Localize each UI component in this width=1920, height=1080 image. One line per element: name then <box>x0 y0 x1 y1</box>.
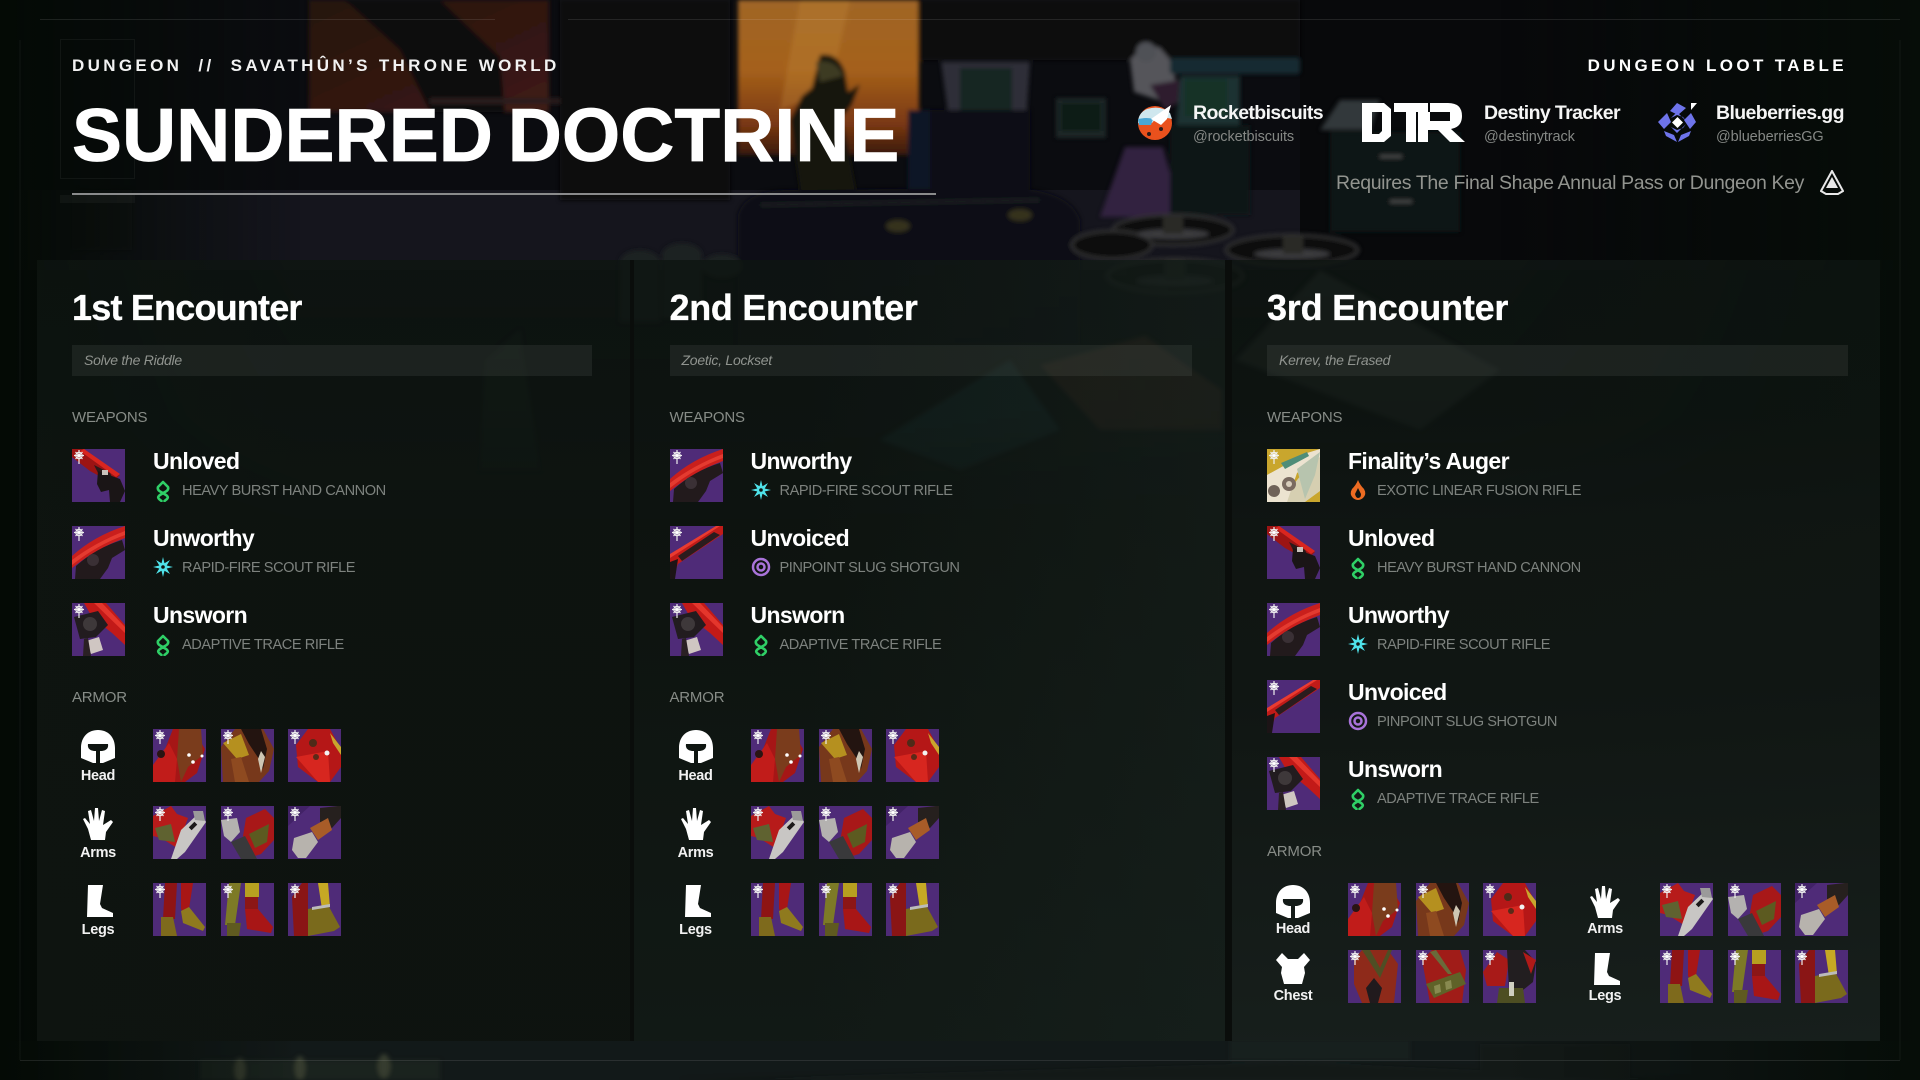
armor slot: Chest <box>1258 952 1328 1008</box>
armor slot: Head <box>678 730 713 784</box>
armor: legs set <box>1795 950 1848 1003</box>
credit: Blueberries.gg <box>1658 102 1844 145</box>
boss note: Kerrev, the Erased <box>1279 352 1390 368</box>
weapon: Finality's Auger <box>1267 448 1581 502</box>
boss note: Zoetic, Lockset <box>682 352 772 368</box>
armor: legs set <box>153 883 206 936</box>
handle: @destinytrack <box>1484 129 1575 145</box>
armor slot: Chest: Chest <box>1274 988 1312 1004</box>
armor slot: Legs: Legs <box>1589 988 1621 1004</box>
armor slot: Head: Head <box>1276 921 1310 937</box>
armor: head set <box>886 729 939 782</box>
armor slot: Head <box>1258 885 1328 941</box>
armor: arms set <box>1660 883 1713 936</box>
armor slot: Legs: Legs <box>679 922 712 938</box>
logo: DTR <box>1362 103 1465 142</box>
armor: head set <box>288 729 341 782</box>
weapon: Unsworn: Unsworn <box>153 602 247 628</box>
weapons label: WEAPONS <box>72 409 147 426</box>
header: loot table label: DUNGEON LOOT TABLE <box>1588 56 1847 75</box>
weapon: Unvoiced: PINPOINT SLUG SHOTGUN <box>1377 714 1557 730</box>
armor: arms set <box>221 806 274 859</box>
armor: legs set <box>1660 950 1713 1003</box>
weapon: Unvoiced: Unvoiced <box>750 525 849 551</box>
armor slot: Arms <box>678 808 714 861</box>
title underline <box>72 193 936 195</box>
armor: legs set <box>221 883 274 936</box>
armor slot: Legs <box>1570 952 1640 1008</box>
weapon: Unworthy: Unworthy <box>153 525 254 551</box>
boss note: Solve the Riddle <box>84 352 182 368</box>
credit: Rocketbiscuits <box>1138 102 1323 145</box>
name: Blueberries.gg <box>1716 102 1844 124</box>
handle: @blueberriesGG <box>1716 129 1824 145</box>
boss note <box>1267 345 1848 376</box>
icon: dungeon key <box>1820 170 1844 195</box>
armor slot: Arms: Arms <box>1587 921 1623 937</box>
armor: arms set <box>886 806 939 859</box>
weapon: Unsworn <box>670 602 942 656</box>
armor: head set <box>1483 883 1536 936</box>
requirement note: Requires The Final Shape Annual Pass or Dungeon Key <box>1336 172 1804 194</box>
armor slot: Legs <box>679 885 712 938</box>
weapon: Unsworn: ADAPTIVE TRACE RIFLE <box>780 637 941 653</box>
weapon: Unloved: Unloved <box>1348 525 1434 551</box>
weapon: Unsworn: ADAPTIVE TRACE RIFLE <box>1377 791 1539 807</box>
weapon: Unvoiced <box>1267 680 1667 733</box>
weapon: Unloved: HEAVY BURST HAND CANNON <box>182 483 386 499</box>
heading: 1st Encounter <box>72 287 302 328</box>
credit: Destiny Tracker <box>1362 102 1620 145</box>
weapon: Finality's Auger: EXOTIC LINEAR FUSION RIFLE <box>1377 483 1581 499</box>
armor: head set <box>153 729 206 782</box>
armor: head set <box>1416 883 1469 936</box>
armor slot: Arms: Arms <box>80 845 116 861</box>
armor slot: Head: Head <box>81 768 115 784</box>
armor: head set <box>751 729 804 782</box>
weapon: Unvoiced: Unvoiced <box>1348 679 1447 705</box>
armor: legs set <box>288 883 341 936</box>
weapons label: WEAPONS <box>670 409 745 426</box>
weapon: Unworthy <box>1267 602 1550 656</box>
weapon: Unsworn: Unsworn <box>750 602 845 628</box>
weapon: Finality's Auger: Finality’s Auger <box>1348 448 1509 474</box>
armor: arms set <box>1728 883 1780 936</box>
weapon: Unloved <box>72 448 386 502</box>
weapon: Unworthy: RAPID-FIRE SCOUT RIFLE <box>780 483 953 499</box>
panel: 2nd encounter <box>634 260 1225 1041</box>
heading: 3rd Encounter <box>1267 287 1508 328</box>
weapon: Unvoiced <box>670 525 960 579</box>
armor: legs set <box>1728 950 1780 1003</box>
armor slot: Legs: Legs <box>82 922 114 938</box>
icon: blueberries <box>1658 103 1697 142</box>
armor: legs set <box>819 883 872 936</box>
boss note <box>670 345 1192 376</box>
armor: legs set <box>751 883 804 936</box>
panel: 1st encounter <box>37 260 630 1041</box>
armor label: ARMOR <box>1267 843 1322 860</box>
heading: 2nd Encounter <box>670 287 918 328</box>
handle: @rocketbiscuits <box>1193 129 1294 145</box>
armor: chest set <box>1348 950 1401 1003</box>
armor slot: Legs <box>82 885 114 938</box>
weapon: Unworthy: Unworthy <box>1348 602 1449 628</box>
armor: head set <box>221 729 274 782</box>
weapon: Unloved: HEAVY BURST HAND CANNON <box>1377 560 1581 576</box>
armor slot: Arms <box>1570 885 1640 941</box>
armor slot: Arms <box>80 808 116 861</box>
weapon: Unworthy <box>72 525 355 579</box>
icon: rocket planet <box>1138 105 1172 140</box>
armor: arms set <box>751 806 804 859</box>
boss note <box>72 345 592 376</box>
weapon: Unworthy: RAPID-FIRE SCOUT RIFLE <box>182 560 355 576</box>
armor: chest set <box>1416 950 1469 1003</box>
weapon: Unworthy: RAPID-FIRE SCOUT RIFLE <box>1377 637 1550 653</box>
weapon: Unloved <box>1267 525 1581 579</box>
weapon: Unvoiced: PINPOINT SLUG SHOTGUN <box>780 560 960 576</box>
armor: arms set <box>1795 883 1848 936</box>
weapon: Unworthy <box>670 448 953 502</box>
weapon: Unsworn <box>1267 757 1667 810</box>
title: SUNDERED DOCTRINE <box>72 93 899 177</box>
weapons label: WEAPONS <box>1267 409 1342 426</box>
armor slot: Arms: Arms <box>678 845 713 861</box>
armor: arms set <box>819 806 872 859</box>
armor: arms set <box>153 806 206 859</box>
armor: head set <box>819 729 872 782</box>
name: Destiny Tracker <box>1484 102 1620 124</box>
armor: chest set <box>1483 950 1536 1003</box>
armor: legs set <box>886 883 939 936</box>
panel: 3rd encounter <box>1232 260 1880 1041</box>
name: Rocketbiscuits <box>1193 102 1323 124</box>
weapon: Unworthy: Unworthy <box>750 448 852 474</box>
header: dungeon kicker: DUNGEON // SAVATHÛN’S THRONE WORLD <box>72 56 560 75</box>
weapon: Unsworn: Unsworn <box>1348 756 1442 782</box>
armor label: ARMOR <box>72 689 127 706</box>
weapon: Unsworn: ADAPTIVE TRACE RIFLE <box>182 637 344 653</box>
armor: arms set <box>288 806 341 859</box>
armor label: ARMOR <box>670 689 724 706</box>
weapon: Unsworn <box>72 602 344 656</box>
armor slot: Head <box>81 730 115 784</box>
armor: head set <box>1348 883 1401 936</box>
weapon: Unloved: Unloved <box>153 448 239 474</box>
armor slot: Head: Head <box>678 768 713 784</box>
